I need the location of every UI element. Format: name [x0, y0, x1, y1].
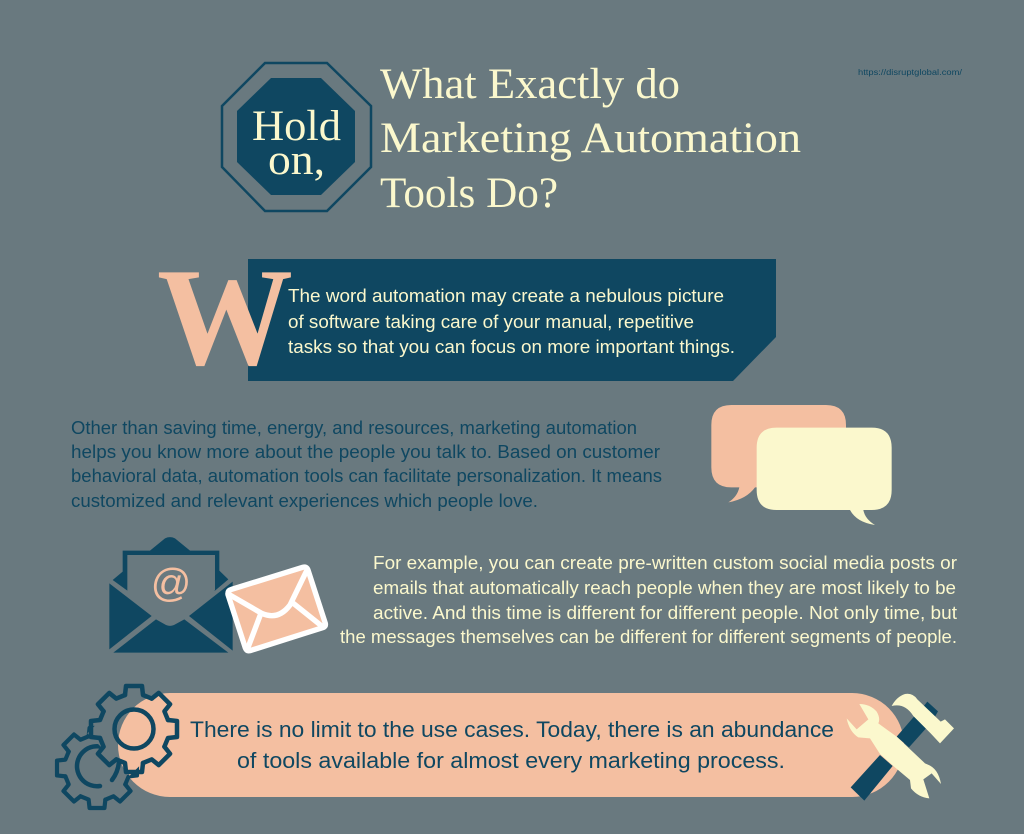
conclusion text — [190, 717, 834, 773]
intro text — [288, 286, 735, 357]
title: Marketing Automation — [380, 115, 801, 162]
text block: saving time — [71, 418, 662, 511]
text block: example: the messages themselves can be different for different segments of people. — [340, 627, 957, 647]
source url: https://disruptglobal.com/ — [858, 68, 963, 77]
icon: hammer and wrench — [847, 694, 954, 801]
text block: example: active. And this time is different for different people. Not only time, but — [373, 603, 957, 623]
text block: example: For example, you can create pre-written custom social media posts or — [373, 553, 957, 573]
text block: saving time: helps you know more about the people you talk to. Based on customer — [71, 442, 660, 462]
icon: peach envelope — [228, 567, 325, 651]
panel: conclusion pill — [118, 693, 904, 797]
badge: Hold on octagon: on, — [268, 137, 325, 184]
text block: saving time: behavioral data, automation tools can facilitate personalization. It means — [71, 466, 662, 486]
conclusion text: There is no limit to the use cases. Today, there is an abundance — [190, 717, 834, 742]
text block: example — [340, 553, 957, 647]
intro text: tasks so that you can focus on more important things. — [288, 337, 735, 357]
icon: open envelope with at sign — [109, 537, 233, 653]
intro text: of software taking care of your manual, repetitive — [288, 312, 694, 332]
icon: speech bubbles — [711, 405, 892, 525]
text block: saving time: Other than saving time, energy, and resources, marketing automation — [71, 418, 637, 438]
icon: gears — [57, 686, 177, 808]
text block: saving time: customized and relevant experiences which people love. — [71, 491, 538, 511]
drop cap W: W — [157, 240, 293, 395]
panel: intro banner — [157, 240, 776, 395]
badge: Hold on octagon: Hold — [252, 103, 341, 150]
badge: Hold on octagon — [222, 63, 371, 211]
text block: example: emails that automatically reach people when they are most likely to be — [373, 578, 956, 598]
title: What Exactly do — [380, 61, 680, 108]
conclusion text: of tools available for almost every marketing process. — [237, 748, 785, 773]
title — [380, 61, 801, 217]
at sign: @ — [151, 561, 191, 605]
title: Tools Do? — [380, 170, 558, 217]
intro text: The word automation may create a nebulous picture — [288, 286, 724, 306]
